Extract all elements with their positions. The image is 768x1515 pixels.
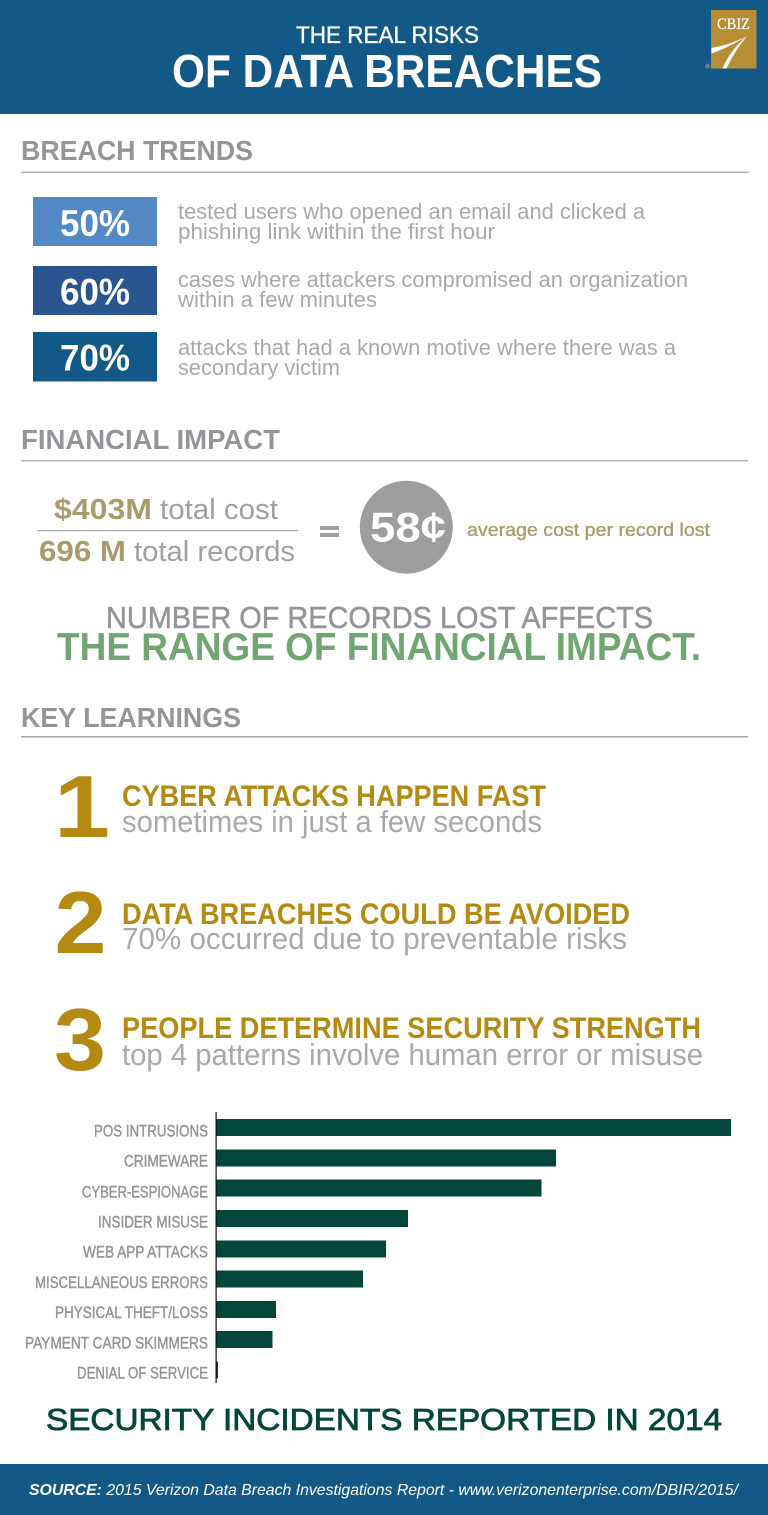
callout: 58 cents circle bbox=[360, 481, 453, 574]
learning 1: CYBER ATTACKS HAPPEN FAST bbox=[122, 780, 546, 813]
callout: 58 cents circle: 58¢ bbox=[370, 504, 446, 550]
statement: records lost: THE RANGE OF FINANCIAL IMPACT. bbox=[57, 626, 701, 669]
category labels: INSIDER MISUSE bbox=[98, 1214, 208, 1232]
learning 1: sometimes in just a few seconds bbox=[122, 804, 542, 839]
category labels: WEB APP ATTACKS bbox=[83, 1244, 208, 1262]
fraction: cost over records bbox=[37, 494, 298, 568]
category labels: CRIMEWARE bbox=[124, 1152, 208, 1170]
footer: source: SOURCE: 2015 Verizon Data Breach Investigations Report - www.verizonenterprise.com/DBIR/2015/ bbox=[29, 1482, 740, 1499]
statement: records lost bbox=[57, 600, 701, 669]
learning 3 bbox=[54, 990, 703, 1089]
category labels: PHYSICAL THEFT/LOSS bbox=[55, 1304, 208, 1322]
stat row: 60%: within a few minutes bbox=[177, 287, 377, 312]
statement: records lost: NUMBER OF RECORDS LOST AFFECTS bbox=[106, 600, 653, 635]
footer: source bbox=[0, 1464, 768, 1515]
icon: CBIZ logo bbox=[705, 10, 756, 68]
fraction: cost over records: total cost bbox=[160, 494, 278, 526]
learning 1 bbox=[54, 757, 546, 856]
stat row: 50%: tested users who opened an email and clicked a bbox=[178, 199, 646, 224]
category labels: DENIAL OF SERVICE bbox=[77, 1364, 208, 1382]
stat row: 60% bbox=[33, 266, 688, 315]
icon: CBIZ logo: CBIZ bbox=[717, 16, 750, 33]
bar chart: security incidents bbox=[25, 1112, 731, 1383]
stat row: 60%: cases where attackers compromised an organization bbox=[178, 267, 688, 292]
bars bbox=[216, 1119, 731, 1378]
category labels: PAYMENT CARD SKIMMERS bbox=[25, 1334, 208, 1352]
stat row: 70%: secondary victim bbox=[178, 355, 340, 380]
stat row: 70% bbox=[33, 332, 677, 382]
category labels: CYBER-ESPIONAGE bbox=[82, 1184, 208, 1202]
learning 2 bbox=[54, 873, 630, 972]
category labels bbox=[25, 1122, 208, 1382]
learning 3: 3 bbox=[54, 990, 106, 1089]
learning 3: PEOPLE DETERMINE SECURITY STRENGTH bbox=[122, 1012, 701, 1045]
section heading: breach trends: BREACH TRENDS bbox=[21, 135, 253, 166]
title: OF DATA BREACHES bbox=[172, 45, 602, 97]
chart caption: SECURITY INCIDENTS REPORTED IN 2014 bbox=[46, 1402, 722, 1437]
stat row: 70%: 70% bbox=[60, 338, 130, 378]
stat row: 50%: phishing link within the first hour bbox=[178, 219, 495, 244]
header banner bbox=[0, 0, 768, 114]
stat row: 50%: 50% bbox=[60, 203, 130, 244]
stat row: 70%: attacks that had a known motive where there was a bbox=[178, 335, 677, 360]
section heading: financial impact: FINANCIAL IMPACT bbox=[21, 424, 280, 455]
category labels: POS INTRUSIONS bbox=[94, 1122, 208, 1140]
fraction: cost over records: $403M bbox=[54, 494, 152, 526]
learning 2: 70% occurred due to preventable risks bbox=[122, 921, 627, 956]
section heading: key learnings: KEY LEARNINGS bbox=[21, 702, 241, 733]
learning 2: DATA BREACHES COULD BE AVOIDED bbox=[122, 898, 630, 931]
fraction: cost over records: total records bbox=[134, 536, 295, 568]
learning 2: 2 bbox=[54, 873, 106, 972]
learning 1: 1 bbox=[54, 757, 110, 856]
learning 3: top 4 patterns involve human error or misuse bbox=[122, 1037, 703, 1072]
category labels: MISCELLANEOUS ERRORS bbox=[35, 1274, 208, 1292]
title: THE REAL RISKS bbox=[296, 22, 479, 49]
stat row: 60%: 60% bbox=[60, 272, 130, 312]
title bbox=[172, 22, 602, 97]
stat row: 50% bbox=[33, 197, 646, 246]
text: average cost per record: average cost per record lost bbox=[467, 520, 710, 540]
fraction: cost over records: 696 M bbox=[39, 536, 126, 568]
equals sign bbox=[320, 526, 339, 537]
